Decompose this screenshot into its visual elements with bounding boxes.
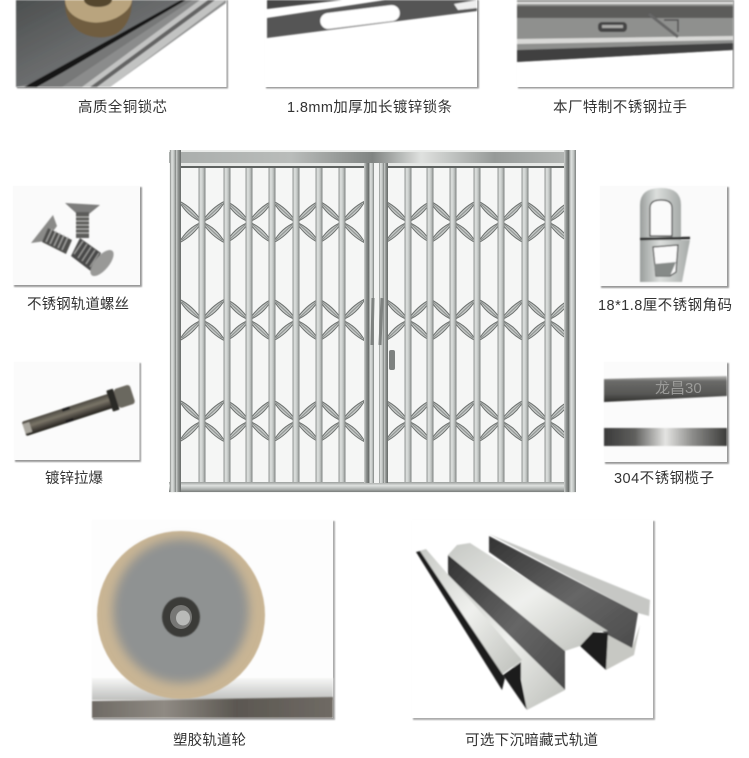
- heading: stainless handle: 本厂特制不锈钢拉手: [553, 99, 687, 116]
- icon: screw left: [31, 215, 72, 254]
- icon: screw right: [71, 238, 118, 280]
- door vertical bars: [198, 163, 552, 484]
- door handles: [372, 298, 382, 345]
- panel: track screws: [13, 186, 142, 287]
- door lock: [389, 350, 395, 370]
- door frame: [169, 150, 576, 492]
- icon: wheel: [97, 531, 265, 699]
- heading: corner bracket: 18*1.8厘不锈钢角码: [598, 297, 732, 314]
- heading: copper lock core: 高质全铜锁芯: [78, 98, 167, 116]
- panel: stainless handle: [517, 0, 734, 88]
- panel: corner bracket: [600, 186, 729, 288]
- panel: expansion bolt: [14, 362, 141, 462]
- panel: copper lock core: [16, 0, 228, 88]
- panel: plastic track wheel: [92, 520, 335, 720]
- heading: concealed track: 可选下沉暗藏式轨道: [465, 732, 598, 749]
- door lattice rows: [179, 201, 571, 442]
- heading: expansion bolt: 镀锌拉爆: [45, 470, 104, 487]
- panel: stainless rods: [604, 362, 729, 464]
- heading: track screws: 不锈钢轨道螺丝: [27, 296, 129, 313]
- icon: expansion bolt: [21, 383, 136, 439]
- embossed rod mark: 龙昌30: [655, 380, 702, 397]
- icon: screw top: [65, 203, 100, 238]
- chart: folding door illustration: [169, 150, 576, 493]
- icon: concealed track channels: [416, 534, 650, 710]
- panel: concealed track: [412, 520, 655, 720]
- icon: bracket: [640, 188, 690, 282]
- heading: lock strip: 1.8mm加厚加长镀锌锁条: [287, 99, 452, 116]
- heading: plastic track wheel: 塑胶轨道轮: [173, 732, 246, 749]
- heading: stainless rods: 304不锈钢榄子: [614, 470, 714, 487]
- panel: lock strip: [265, 0, 479, 88]
